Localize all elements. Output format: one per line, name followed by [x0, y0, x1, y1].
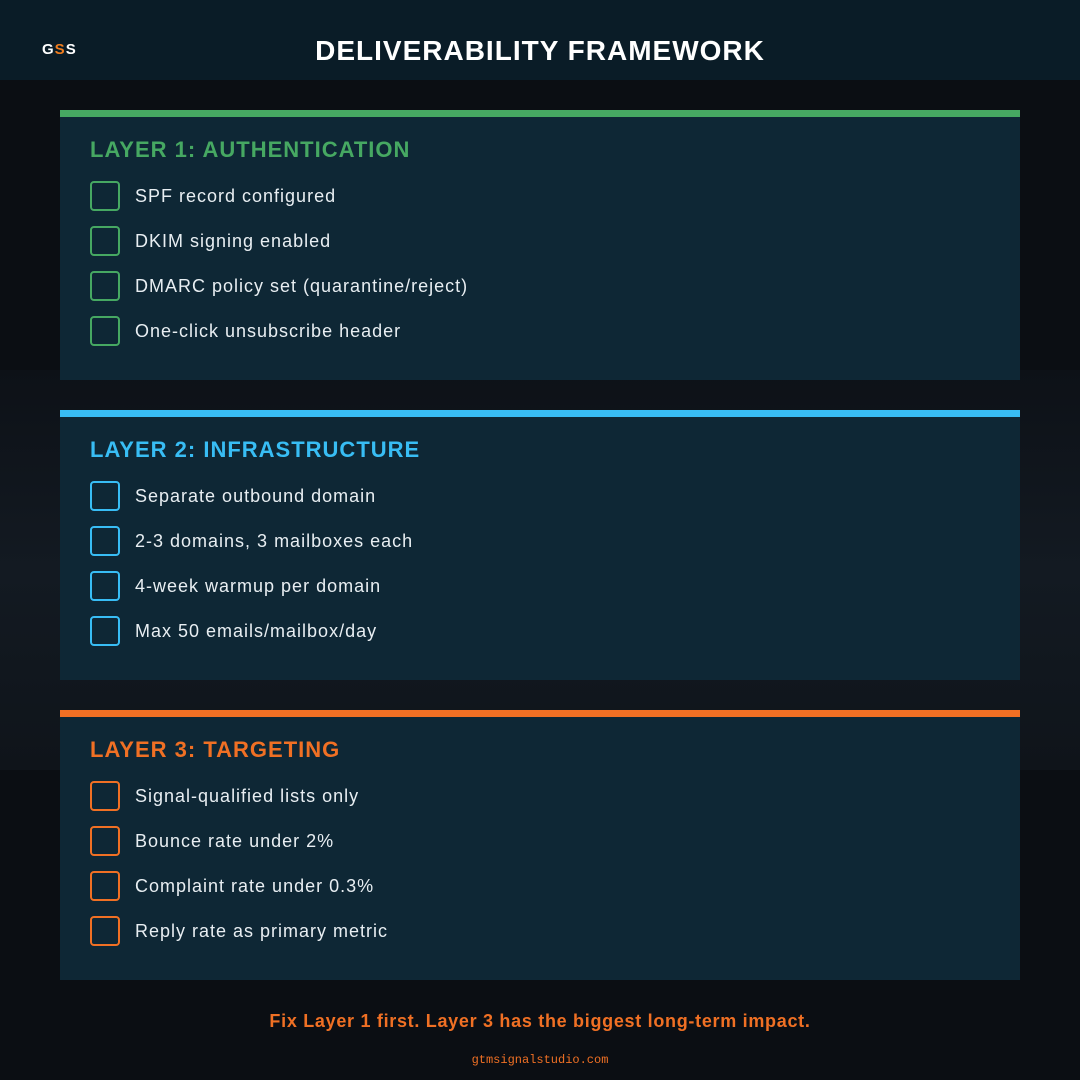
- item: SPF: SPF record configured: [135, 186, 336, 206]
- panel: layer 1 authentication: [60, 110, 1020, 380]
- item: DKIM: [90, 226, 331, 256]
- item: reply rate: [90, 916, 388, 946]
- title: DELIVERABILITY FRAMEWORK: [315, 35, 765, 66]
- item: separate domain: Separate outbound domain: [135, 486, 376, 506]
- footer callout: Fix Layer 1 first. Layer 3 has the biggest long-term impact.: [269, 1011, 811, 1031]
- item: reply rate: Reply rate as primary metric: [135, 921, 388, 941]
- heading: layer 1: LAYER 1: AUTHENTICATION: [90, 137, 410, 162]
- heading: layer 2: LAYER 2: INFRASTRUCTURE: [90, 437, 420, 462]
- item: bounce: [90, 826, 334, 856]
- item: warmup: 4-week warmup per domain: [135, 576, 381, 596]
- item: DMARC: DMARC policy set (quarantine/reject): [135, 276, 468, 296]
- heading: layer 3: LAYER 3: TARGETING: [90, 737, 340, 762]
- item: bounce: Bounce rate under 2%: [135, 831, 334, 851]
- item: DMARC: [90, 271, 468, 301]
- item: signal lists: [90, 781, 359, 811]
- item: domains: 2-3 domains, 3 mailboxes each: [135, 531, 413, 551]
- panel: layer 2 infrastructure: [60, 410, 1020, 680]
- item: unsubscribe: One-click unsubscribe header: [135, 321, 401, 341]
- logo: GSS: [42, 41, 77, 58]
- item: domains: [90, 526, 413, 556]
- header bar: [0, 0, 1080, 80]
- item: DKIM: DKIM signing enabled: [135, 231, 331, 251]
- item: warmup: [90, 571, 381, 601]
- item: signal lists: Signal-qualified lists only: [135, 786, 359, 806]
- item: max emails: [90, 616, 377, 646]
- item: complaint: [90, 871, 374, 901]
- url: gtmsignalstudio.com: [472, 1053, 608, 1067]
- item: max emails: Max 50 emails/mailbox/day: [135, 621, 377, 641]
- item: complaint: Complaint rate under 0.3%: [135, 876, 374, 896]
- panel: layer 3 targeting: [60, 710, 1020, 980]
- item: SPF: [90, 181, 336, 211]
- item: unsubscribe: [90, 316, 401, 346]
- item: separate domain: [90, 481, 376, 511]
